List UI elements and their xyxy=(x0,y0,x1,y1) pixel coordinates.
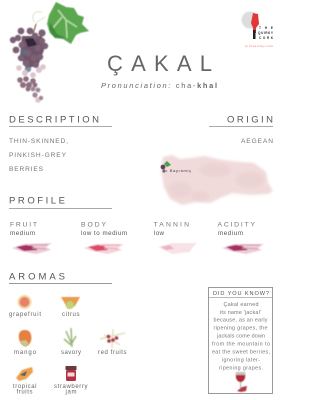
logo wordmark xyxy=(258,26,274,40)
panel: description: PINKISH-GREY xyxy=(9,152,67,159)
heading: origin: ORIGIN xyxy=(227,114,273,126)
logo wordmark: T H E xyxy=(259,26,273,30)
aroma: tropical fruits xyxy=(13,367,36,396)
logo wordmark: QUIRKY xyxy=(258,31,274,35)
profile: body xyxy=(81,222,127,254)
profile: fruit: medium xyxy=(10,230,35,237)
aroma: strawberry jam: strawberry xyxy=(54,384,88,390)
callout text: ripening grapes, the xyxy=(214,326,268,332)
logo: The Quirky Cork xyxy=(242,12,274,48)
aroma: tropical fruits: fruits xyxy=(16,390,32,396)
title: ÇAKAL xyxy=(107,51,212,76)
map of Turkey xyxy=(161,155,273,205)
profile: tannin: low xyxy=(154,230,165,237)
grape illustration xyxy=(10,2,89,103)
aroma: savory: savory xyxy=(61,350,81,356)
profile: acidity: medium xyxy=(218,230,243,237)
aroma: strawberry jam xyxy=(54,366,88,396)
callout: did you know xyxy=(208,288,272,394)
callout text: ignoring later- xyxy=(222,358,260,364)
profile: fruit xyxy=(10,222,52,254)
icon: wine glass xyxy=(236,372,247,392)
aroma: grapefruit: grapefruit xyxy=(9,312,41,318)
panel: origin xyxy=(161,114,273,205)
profile: acidity: ACIDITY xyxy=(218,222,255,228)
logo wordmark: CORK xyxy=(259,36,274,40)
heading: profile: PROFILE xyxy=(9,196,65,206)
aroma: mango: mango xyxy=(14,350,37,356)
callout text: eat the sweet berries, xyxy=(212,350,270,356)
callout text: from the mountain to xyxy=(212,342,270,348)
pronunciation: Pronunciation: cha-khal xyxy=(101,81,217,90)
profile: body: low to medium xyxy=(81,230,127,237)
profile: acidity xyxy=(218,222,264,254)
logo handle: ◎ thequirky.cork xyxy=(245,44,274,48)
callout text: ripening grapes. xyxy=(219,366,263,372)
grape bunch xyxy=(20,36,44,68)
grape leaf xyxy=(47,2,89,44)
aroma: citrus: citrus xyxy=(62,312,80,318)
aroma: red fruits: red fruits xyxy=(98,350,126,356)
panel: aromas xyxy=(9,272,126,396)
aroma: strawberry jam: jam xyxy=(64,390,76,396)
callout text: because, as an early xyxy=(214,318,268,324)
profile: tannin: TANNIN xyxy=(154,222,189,228)
aroma: tropical fruits: tropical xyxy=(13,384,36,390)
panel: description xyxy=(9,114,112,173)
callout text: Çakal earned xyxy=(224,302,258,308)
profile: fruit: FRUIT xyxy=(10,222,37,228)
logo tree xyxy=(242,12,258,28)
callout text: its name 'jackal' xyxy=(220,310,261,316)
origin text: AEGEAN xyxy=(241,138,273,145)
heading: aromas: AROMAS xyxy=(9,272,65,282)
map marker: Bayramiç: • Bayramiç xyxy=(166,168,191,173)
callout text: jackals come down xyxy=(216,334,265,340)
callout text xyxy=(212,302,270,372)
profile: tannin xyxy=(154,222,197,254)
panel: description: BERRIES xyxy=(9,166,44,173)
panel: profile xyxy=(9,196,264,254)
heading: description: DESCRIPTION xyxy=(9,114,99,126)
profile: body: BODY xyxy=(81,222,106,228)
callout heading: DID YOU KNOW? xyxy=(213,291,269,297)
description text: THIN-SKINNED, xyxy=(9,138,68,145)
